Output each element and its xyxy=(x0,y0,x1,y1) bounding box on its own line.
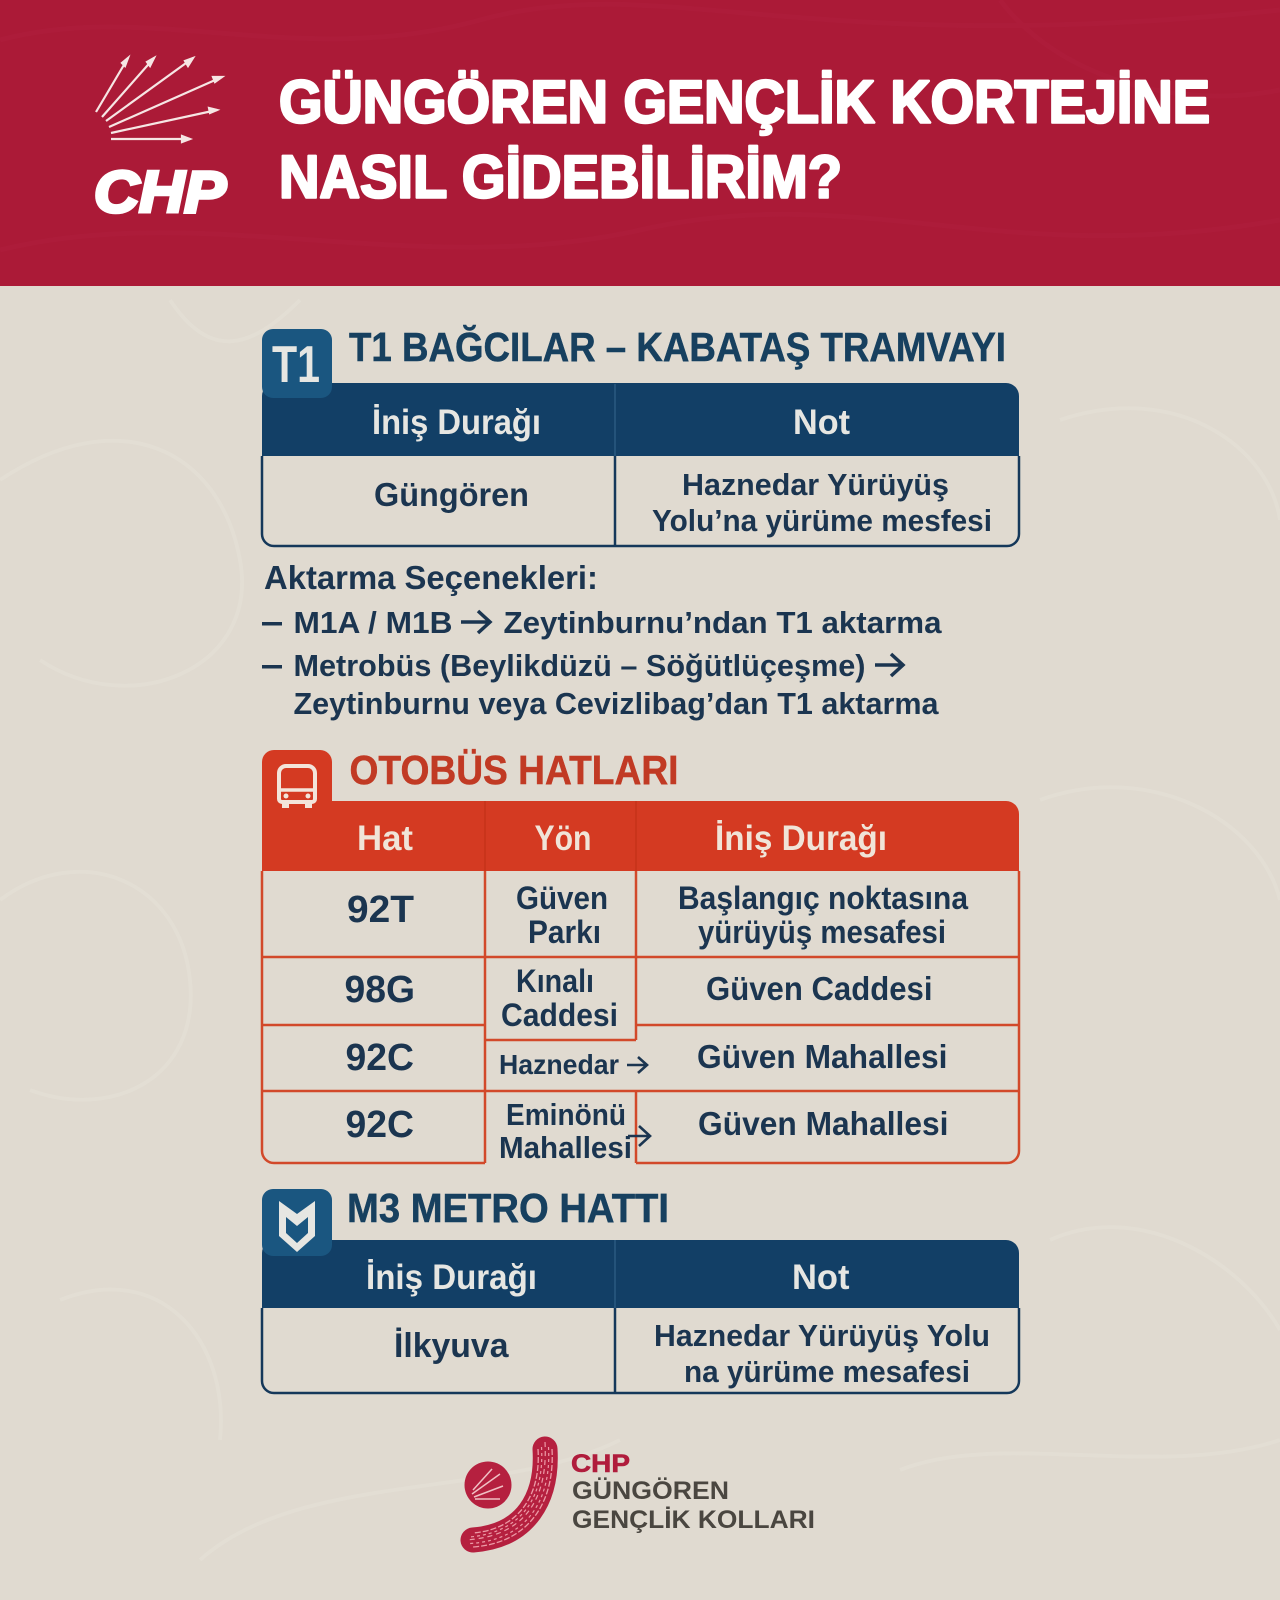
bus table xyxy=(262,801,1019,1165)
bus table: Başlangıç noktasına xyxy=(678,880,968,916)
bus heading: OTOBÜS HATLARI xyxy=(350,747,678,793)
bus table: Haznedar xyxy=(499,1049,619,1080)
footer wordmark: CHP xyxy=(571,1450,630,1478)
bus table: 92C xyxy=(346,1037,414,1079)
bus table: Eminönü xyxy=(506,1097,626,1132)
M3 table: Haznedar Yürüyüş Yolu xyxy=(654,1318,990,1353)
bus table: Güven xyxy=(516,880,608,916)
bus table: 92T xyxy=(347,889,414,931)
footer logo mark xyxy=(464,1442,552,1547)
bus table: 92C xyxy=(346,1104,414,1146)
transfer options text: Zeytinburnu veya Cevizlibag’dan T1 aktarma xyxy=(294,686,939,721)
T1 section badge: T1 xyxy=(272,336,320,394)
M3 table: na yürüme mesafesi xyxy=(684,1354,970,1389)
bus table: Güven Mahallesi xyxy=(697,1038,948,1075)
bus table: Yön xyxy=(534,819,592,858)
CHP six arrows logo xyxy=(96,58,222,142)
T1 table: Not xyxy=(793,403,850,442)
M3 section badge xyxy=(262,1189,332,1256)
T1 table xyxy=(262,383,1019,546)
M3 table xyxy=(262,1240,1019,1393)
header banner xyxy=(0,0,1280,286)
M3 table: Not xyxy=(792,1258,850,1297)
CHP wordmark: CHP xyxy=(94,160,226,225)
T1 table: İniş Durağı xyxy=(372,403,541,442)
transfer options text: Aktarma Seçenekleri: xyxy=(264,559,598,596)
bus table: Güven Caddesi xyxy=(706,970,932,1007)
bus table: Kınalı xyxy=(516,963,594,999)
T1 table: Yolu’na yürüme mesfesi xyxy=(652,503,992,538)
transfer options text: Metrobüs (Beylikdüzü – Söğütlüçeşme) xyxy=(294,648,866,683)
bus section badge xyxy=(262,750,332,815)
bus table: Mahallesi xyxy=(499,1130,632,1165)
M3 heading: M3 METRO HATTI xyxy=(347,1185,669,1231)
transfer options text xyxy=(262,559,942,721)
title xyxy=(279,68,1210,210)
bus table: Güven Mahallesi xyxy=(698,1105,948,1142)
bus table: İniş Durağı xyxy=(715,819,887,858)
title: NASIL GİDEBİLİRİM? xyxy=(279,144,842,210)
transfer options text: Zeytinburnu’ndan T1 aktarma xyxy=(504,605,942,640)
bus table: 98G xyxy=(344,969,415,1011)
T1 heading: T1 BAĞCILAR – KABATAŞ TRAMVAYI xyxy=(349,324,1006,370)
bus table: Parkı xyxy=(528,914,601,950)
footer wordmark xyxy=(571,1450,815,1534)
transfer options text: M1A / M1B xyxy=(294,605,452,640)
bus table: Caddesi xyxy=(501,997,618,1033)
title: GÜNGÖREN GENÇLİK KORTEJİNE xyxy=(279,68,1210,136)
footer wordmark: GENÇLİK KOLLARI xyxy=(572,1506,815,1534)
T1 table: Güngören xyxy=(374,476,529,513)
M3 table: İniş Durağı xyxy=(366,1258,537,1297)
T1 table: Haznedar Yürüyüş xyxy=(682,467,949,502)
bus table: yürüyüş mesafesi xyxy=(698,914,946,950)
footer wordmark: GÜNGÖREN xyxy=(572,1476,729,1505)
bus table: Hat xyxy=(357,819,413,858)
M3 table: İlkyuva xyxy=(394,1327,510,1365)
